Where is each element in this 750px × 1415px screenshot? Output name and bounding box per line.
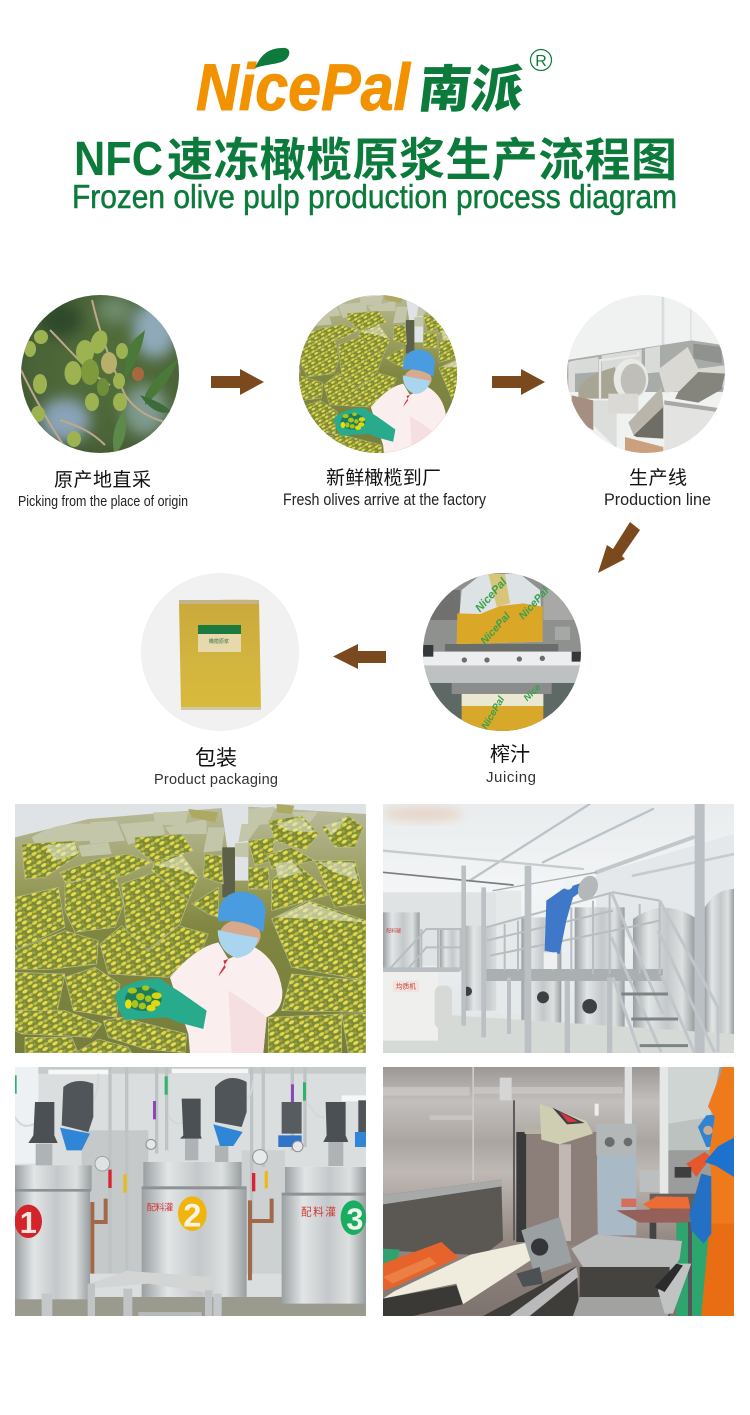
orange product bag [383,1242,459,1290]
photo: filling and weighing machine [383,1067,734,1316]
label Chinese: 新鲜橄榄到厂 [326,467,441,489]
photo circle: juice bag on machine: Nice [522,682,543,703]
label English: Juicing [486,769,536,786]
arrow 1 [211,369,264,395]
photo circle: juice bag on machine: NicePal [517,585,552,622]
label Chinese: 包装 [195,747,237,770]
photo: three batching tanks [15,1067,366,1316]
scale display [525,1104,593,1241]
arrow 2 [492,369,545,395]
logo Chinese name: 南派 [416,61,527,118]
photo circle: product package [141,573,299,731]
brand logo [196,48,552,124]
photo: clean workshop with tanks and platform [383,804,734,1053]
logo leaf [255,48,289,68]
label Chinese: 榨汁 [490,743,530,766]
photo: clean workshop with tanks and platform: 均质机 [396,982,416,991]
tank 2: 配料灌 [147,1201,173,1212]
background worker [675,1114,716,1178]
tank 3: 配料灌 [301,1206,336,1219]
worker in orange [690,1067,734,1316]
arrow 3 diagonal [598,522,640,573]
label English: Production line [604,491,711,509]
photo circle: olives on branch [21,295,179,455]
label Chinese: 生产线 [629,467,687,489]
photo circle: juice bag on machine: NicePal [473,576,510,615]
tank 1: 1 [20,1206,37,1240]
step 3: production line [565,292,730,509]
tank 3 [278,1100,366,1304]
photo circle: juice bag on machine: NicePal [478,610,514,647]
label English: Fresh olives arrive at the factory [283,491,487,509]
title English: Frozen olive pulp production process diagram [72,178,677,215]
step 5: packaging [141,573,299,788]
tank 2 [95,1078,267,1297]
label English: Product packaging [154,772,278,788]
machine cabinet [596,1124,660,1235]
arrow 4 left [333,644,386,669]
tank 3: 3 [346,1203,363,1237]
lower table frame [483,1266,580,1316]
step 4: juicing [420,570,585,786]
label Chinese: 原产地直采 [54,469,151,491]
package label: 橄榄原浆 [209,638,229,645]
title Chinese: 速冻橄榄原浆生产流程图 [167,134,677,186]
package label [198,625,241,652]
package bag [179,600,261,710]
label English: Picking from the place of origin [18,494,188,510]
registered mark: R [535,53,547,70]
step 2: fresh olives arrive [284,295,486,508]
photo: clean workshop with tanks and platform: 配料罐 [386,927,401,934]
title Chinese: NFC [74,133,163,186]
photo: olive bags and worker [15,804,366,1053]
photo circle: juice bag on machine: NicePal [480,695,507,731]
step 1: picking from origin [18,295,188,510]
tank 1 [15,1081,93,1299]
gear motor [516,1217,572,1287]
logo wordmark NicePal: NicePal [196,50,411,124]
conveyor belt [383,1242,536,1304]
table with orange bag [616,1196,692,1316]
tank 2: 2 [183,1196,201,1233]
registered mark [530,50,552,70]
photo circle: production machine [565,292,730,457]
photo circle: worker with olives [299,295,457,453]
foreground platform [42,1271,222,1316]
photo circle: juice bag on machine [420,570,585,735]
